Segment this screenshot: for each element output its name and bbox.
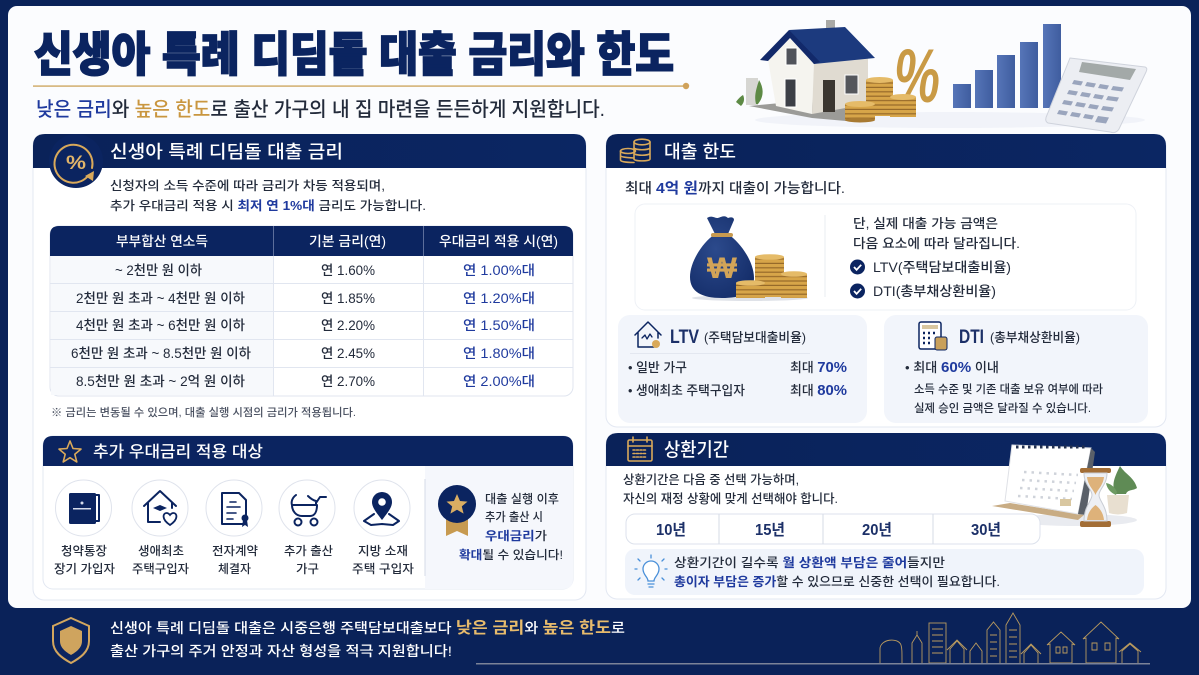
heading bar <box>606 433 1166 466</box>
subtitle: 낮은 금리와 높은 한도로 출산 가구의 내 집 마련을 든든하게 지원합니다. <box>36 98 605 121</box>
card: LTV: (주택담보대출비율) <box>704 330 806 345</box>
table rows: 8.5천만 원 초과 ~ 2억 원 이하 <box>76 374 246 389</box>
description text: 상환기간은 다음 중 선택 가능하며, <box>623 473 799 487</box>
footer banner <box>53 613 1150 664</box>
title underline <box>33 83 689 89</box>
card: DTI: (총부채상환비율) <box>990 330 1080 345</box>
tip box <box>625 549 1144 595</box>
hero illustration: house, coins, bars, calculator <box>736 20 1147 133</box>
table rows: 연 2.00%대 <box>463 374 535 389</box>
table footnote: ※ 금리는 변동될 수 있으며, 대출 실행 시점의 금리가 적용됩니다. <box>51 405 356 419</box>
item: regional home buyer: 지방 소재 <box>358 543 408 558</box>
table header <box>116 234 558 249</box>
card: DTI: DTI <box>959 327 984 348</box>
description text: 신청자의 소득 수준에 따라 금리가 차등 적용되며, <box>110 179 385 193</box>
icon: light bulb <box>635 555 667 587</box>
heading bar <box>43 436 573 466</box>
table rows: 6천만 원 초과 ~ 8.5천만 원 이하 <box>71 346 252 361</box>
card: DTI: 실제 승인 금액은 달라질 수 있습니다. <box>914 401 1091 415</box>
table rows: 연 2.45% <box>321 346 375 361</box>
item: additional birth household <box>279 480 335 576</box>
rate table <box>50 226 573 396</box>
icon: star <box>59 441 81 462</box>
footer text: 신생아 특례 디딤돌 대출은 시중은행 주택담보대출보다 낮은 금리 와 높은 한도 로 <box>110 619 625 637</box>
icon: calendar <box>628 437 652 461</box>
item: regional home buyer: 주택 구입자 <box>352 562 414 576</box>
card: LTV: • 일반 가구 <box>628 360 687 375</box>
icon: money bag: ₩ <box>707 252 738 285</box>
item: additional birth household: 가구 <box>296 562 319 576</box>
tip box: 총이자 부담은 증가 할 수 있으므로 신중한 선택이 필요합니다. <box>674 574 1000 589</box>
repayment term buttons: 30년 <box>971 521 1001 539</box>
footer banner: 출산 가구의 주거 안정과 자산 형성을 적극 지원합니다! <box>110 643 452 659</box>
icon: percent circle: % <box>66 153 86 174</box>
panel: loan limit <box>606 134 1166 427</box>
repayment term buttons <box>626 514 1040 544</box>
item: subscription savings: 청약통장 <box>61 544 107 558</box>
description text <box>110 179 426 213</box>
checklist item: LTV: LTV(주택담보대출비율) <box>873 260 1011 275</box>
icon: percent sign: % <box>894 34 940 119</box>
heading text: 추가 우대금리 적용 대상 <box>93 443 263 461</box>
checklist item: DTI: DTI(총부채상환비율) <box>873 284 996 299</box>
callout: medal note: 우대금리 가 <box>485 529 547 543</box>
repayment term buttons: 20년 <box>862 521 892 539</box>
item: additional birth household: 추가 출산 <box>284 544 333 558</box>
table header: 부부합산 연소득 <box>116 234 208 249</box>
icon: calculator <box>1046 58 1147 133</box>
repayment term buttons: 10년 <box>656 521 686 539</box>
illustration: desk calendar, hourglass, plant <box>992 445 1137 527</box>
table header: 기본 금리(연) <box>309 234 386 249</box>
table rows: 연 1.00%대 <box>463 263 535 278</box>
panel heading text: 신생아 특례 디딤돌 대출 금리 <box>110 142 343 162</box>
icon: money bag <box>690 216 808 301</box>
card: DTI: 소득 수준 및 기존 대출 보유 여부에 따라 <box>914 382 1103 396</box>
description text: 추가 우대금리 적용 시 최저 연 1%대 금리도 가능합니다. <box>110 198 426 213</box>
item: e-contract: 전자계약 <box>212 544 258 558</box>
table rows: 4천만 원 초과 ~ 6천만 원 이하 <box>76 318 246 333</box>
panel: repayment period: 자신의 재정 상황에 맞게 선택해야 합니다. <box>623 491 838 506</box>
item: e-contract: 체결자 <box>218 562 251 576</box>
table rows: 연 1.50%대 <box>463 318 535 333</box>
tip box: 상환기간이 길수록 월 상환액 부담은 줄어 들지만 <box>674 555 946 570</box>
panel: additional preferential rate <box>43 436 573 589</box>
card: LTV: • 생애최초 주택구입자 <box>628 383 745 398</box>
item: first home buyer <box>132 480 189 576</box>
callout: medal note <box>438 485 563 562</box>
title: 신생아 특례 디딤돌 대출 금리와 한도 <box>34 28 674 81</box>
heading bar <box>606 134 1166 168</box>
panel: repayment period <box>606 433 1166 599</box>
card: LTV: LTV <box>670 327 699 348</box>
table rows <box>71 263 535 389</box>
item: subscription savings <box>54 480 115 576</box>
card: DTI: • 최대 60% 이내 <box>905 359 999 376</box>
icon: house <box>736 20 875 121</box>
table rows: 연 2.70% <box>321 374 375 389</box>
icon: house with graph <box>635 322 661 347</box>
icon: percent circle <box>49 134 103 188</box>
table rows: ~ 2천만 원 이하 <box>115 263 203 278</box>
card: DTI <box>884 315 1148 423</box>
icon: coin stacks <box>845 77 916 122</box>
callout: medal note: 추가 출산 시 <box>485 510 543 524</box>
heading text: 대출 한도 <box>664 142 736 162</box>
icon: calculator and coins <box>919 322 947 350</box>
icon: shield <box>53 618 89 663</box>
item: first home buyer: 생애최초 <box>138 544 184 558</box>
panel heading bar <box>33 134 586 168</box>
item: regional home buyer <box>352 480 414 576</box>
table rows: 연 1.80%대 <box>463 346 535 361</box>
card: LTV: 최대 70% <box>790 359 847 376</box>
bar chart graphic <box>953 24 1061 108</box>
table rows: 연 1.20%대 <box>463 291 535 306</box>
maximum amount statement: 최대 4억 원까지 대출이 가능합니다. <box>625 180 845 197</box>
conditions text: 단, 실제 대출 가능 금액은 <box>853 216 998 231</box>
callout: medal note: 대출 실행 이후 <box>485 491 559 506</box>
item: e-contract <box>206 480 262 576</box>
table header: 우대금리 적용 시(연) <box>439 234 558 249</box>
item: subscription savings: 장기 가입자 <box>54 562 115 576</box>
item: first home buyer: 주택구입자 <box>132 562 189 576</box>
card: LTV <box>618 315 867 423</box>
callout: medal note: 확대될 수 있습니다! <box>459 547 563 562</box>
card: LTV: 최대 80% <box>790 382 847 399</box>
limit conditions box <box>635 204 1136 310</box>
table rows: 연 2.20% <box>321 318 375 333</box>
icon: skyline <box>880 613 1141 663</box>
limit conditions box: 다음 요소에 따라 달라집니다. <box>853 236 1020 251</box>
icon: coins <box>620 139 650 162</box>
table rows: 연 1.60% <box>321 263 375 278</box>
heading text: 상환기간 <box>664 439 729 461</box>
repayment term buttons: 15년 <box>755 521 785 539</box>
table rows: 연 1.85% <box>321 291 375 306</box>
table rows: 2천만 원 초과 ~ 4천만 원 이하 <box>76 291 246 306</box>
panel: loan interest rate <box>33 134 586 600</box>
